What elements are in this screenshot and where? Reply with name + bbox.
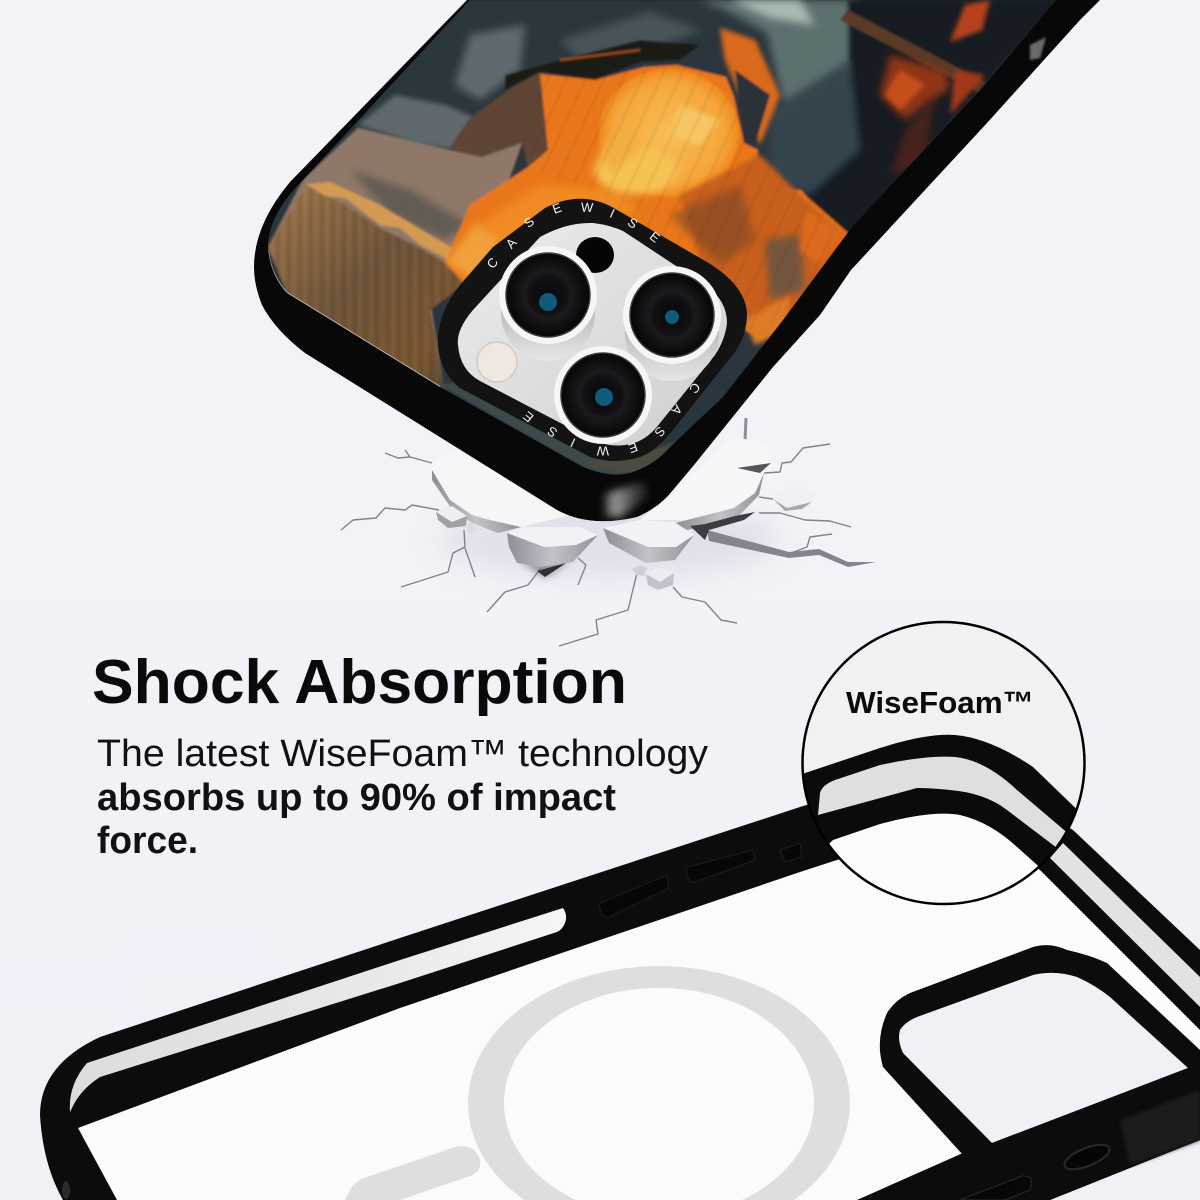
body text xyxy=(97,733,708,862)
magnifier fill xyxy=(800,620,1090,910)
magsafe pill xyxy=(345,1146,480,1200)
camera bumper xyxy=(438,199,747,461)
clear back panel xyxy=(78,820,1200,1200)
dark wedge xyxy=(690,512,755,540)
top phone with case xyxy=(254,0,1100,521)
chunk centre right xyxy=(603,520,694,563)
under chunk shadow xyxy=(520,560,570,578)
magnified foam strip xyxy=(818,757,1070,848)
magsafe ring xyxy=(468,966,850,1200)
crater shadow xyxy=(440,502,780,578)
lens 1 xyxy=(499,246,597,361)
foam strip right xyxy=(1050,843,1200,1007)
bottom slot xyxy=(960,1176,1031,1200)
orange arch right xyxy=(720,28,780,145)
magnified clear panel xyxy=(829,814,1038,903)
dark triangle xyxy=(737,463,771,473)
bumper highlight xyxy=(603,482,650,517)
side button highlight xyxy=(1030,37,1046,60)
silver camera plateau xyxy=(458,223,727,446)
lens 3 xyxy=(554,346,652,444)
brown shore xyxy=(268,128,522,395)
microphone hole xyxy=(576,237,614,273)
camera cut-out xyxy=(880,945,1200,1155)
bottom band xyxy=(857,1060,1200,1200)
lens 2 xyxy=(623,266,721,381)
flash xyxy=(477,342,517,382)
bottom band texture xyxy=(1120,1090,1200,1165)
camera island xyxy=(438,199,747,461)
heading: Shock Absorption xyxy=(92,648,627,717)
right slab top xyxy=(640,437,769,520)
moon xyxy=(599,69,739,197)
body line 3: force. xyxy=(97,820,198,862)
chunk centre left xyxy=(507,527,598,577)
left slab top xyxy=(432,440,570,527)
ring brand text top: CASEWISE xyxy=(484,200,663,271)
orange sky xyxy=(445,65,848,340)
port hole xyxy=(1061,1140,1113,1174)
magnifier view xyxy=(804,734,1076,868)
painting xyxy=(260,0,1060,480)
teal fan xyxy=(702,0,862,104)
dark right forest xyxy=(790,0,1060,240)
magnifier callout xyxy=(790,620,1090,920)
left slab wall xyxy=(432,470,521,533)
wedge crack right xyxy=(707,530,876,567)
side buttons xyxy=(600,843,802,918)
small chunks xyxy=(436,485,816,590)
case body xyxy=(254,0,1100,521)
arch band xyxy=(505,40,700,90)
painting base xyxy=(260,0,1060,480)
ember streaks xyxy=(840,10,985,92)
magnifier label: WiseFoam™ xyxy=(846,685,1034,720)
hairline cracks xyxy=(341,444,851,646)
upper right stub crack xyxy=(745,418,746,440)
magnifier ring xyxy=(802,622,1084,904)
slate hills xyxy=(470,0,700,1)
clear case with black bumper xyxy=(40,760,1200,1200)
cracked ground impact xyxy=(341,418,876,646)
artwork on glass xyxy=(260,0,1060,480)
outer black frame xyxy=(40,760,1200,1200)
lower glass reflection xyxy=(442,382,626,474)
body line 1: The latest WiseFoam™ technology xyxy=(97,733,708,775)
magnified bumper xyxy=(804,734,1076,866)
glass rim xyxy=(268,250,440,387)
right of moon reflections xyxy=(680,155,845,340)
body line 2: absorbs up to 90% of impact xyxy=(97,777,616,819)
right slab wall xyxy=(676,473,764,530)
foam strip left xyxy=(70,908,566,1112)
left dusk cloud xyxy=(448,72,548,166)
left notch xyxy=(62,1181,70,1199)
ring brand text bottom: CASEWISE xyxy=(520,380,704,458)
